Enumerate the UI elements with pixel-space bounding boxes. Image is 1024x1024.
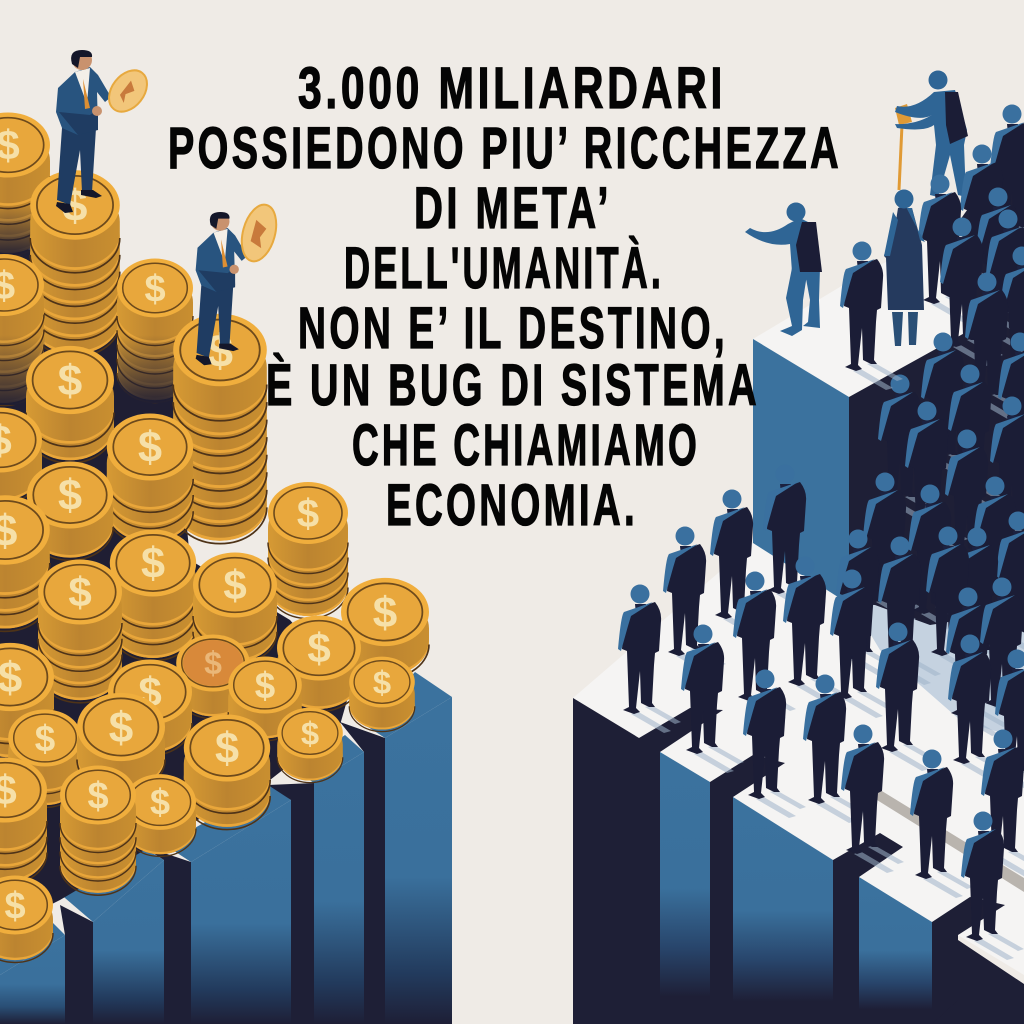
pillar 3	[165, 783, 314, 1024]
panel: staircase pillars	[573, 600, 1024, 1024]
block top face	[753, 240, 1024, 397]
orange coin stack: $	[204, 645, 222, 681]
businessman 1 with coin	[56, 50, 155, 213]
crowd of people	[618, 70, 1024, 960]
top man holding pole	[895, 70, 968, 197]
block dark face	[849, 300, 1024, 625]
title: È UN BUG DI SISTEMA	[266, 353, 760, 418]
pillar 5	[932, 940, 1024, 1024]
title: DI META’	[414, 176, 612, 241]
man with back turned	[840, 242, 903, 390]
panel: coin shadow mass	[0, 240, 350, 930]
pillar 1	[0, 900, 93, 1024]
title: DELL'UMANITÀ.	[344, 236, 664, 301]
pillar 4	[295, 722, 385, 1024]
pillar 3	[733, 797, 903, 1024]
panel: right staircase floor	[573, 543, 1024, 975]
upper dark crowd mass	[960, 130, 1024, 330]
title: 3.000 MILIARDARI	[298, 56, 726, 121]
pillar 2	[660, 752, 785, 1024]
pillar 5	[365, 672, 452, 1024]
title: CHE CHIAMIAMO	[352, 413, 700, 478]
pointing man	[745, 202, 822, 336]
held coin 2	[236, 201, 282, 265]
orange coin stack	[176, 634, 250, 719]
pillar 2	[58, 840, 191, 1024]
pillar 1	[573, 698, 723, 1024]
title: NON E’ IL DESTINO,	[298, 296, 728, 361]
woman figure	[884, 190, 925, 346]
panel: elevated block	[753, 130, 1024, 625]
held coin 1	[101, 63, 155, 119]
floor crowd shade	[850, 600, 1024, 740]
businessman 2 with coin	[196, 201, 282, 365]
panel: coin stacks	[0, 112, 429, 962]
block blue face	[753, 339, 849, 604]
pillar 4	[859, 877, 1005, 1024]
panel: blue pillars under coins	[0, 672, 452, 1024]
floor step shadow	[877, 788, 1024, 892]
title	[168, 56, 842, 538]
title: ECONOMIA.	[386, 473, 638, 538]
